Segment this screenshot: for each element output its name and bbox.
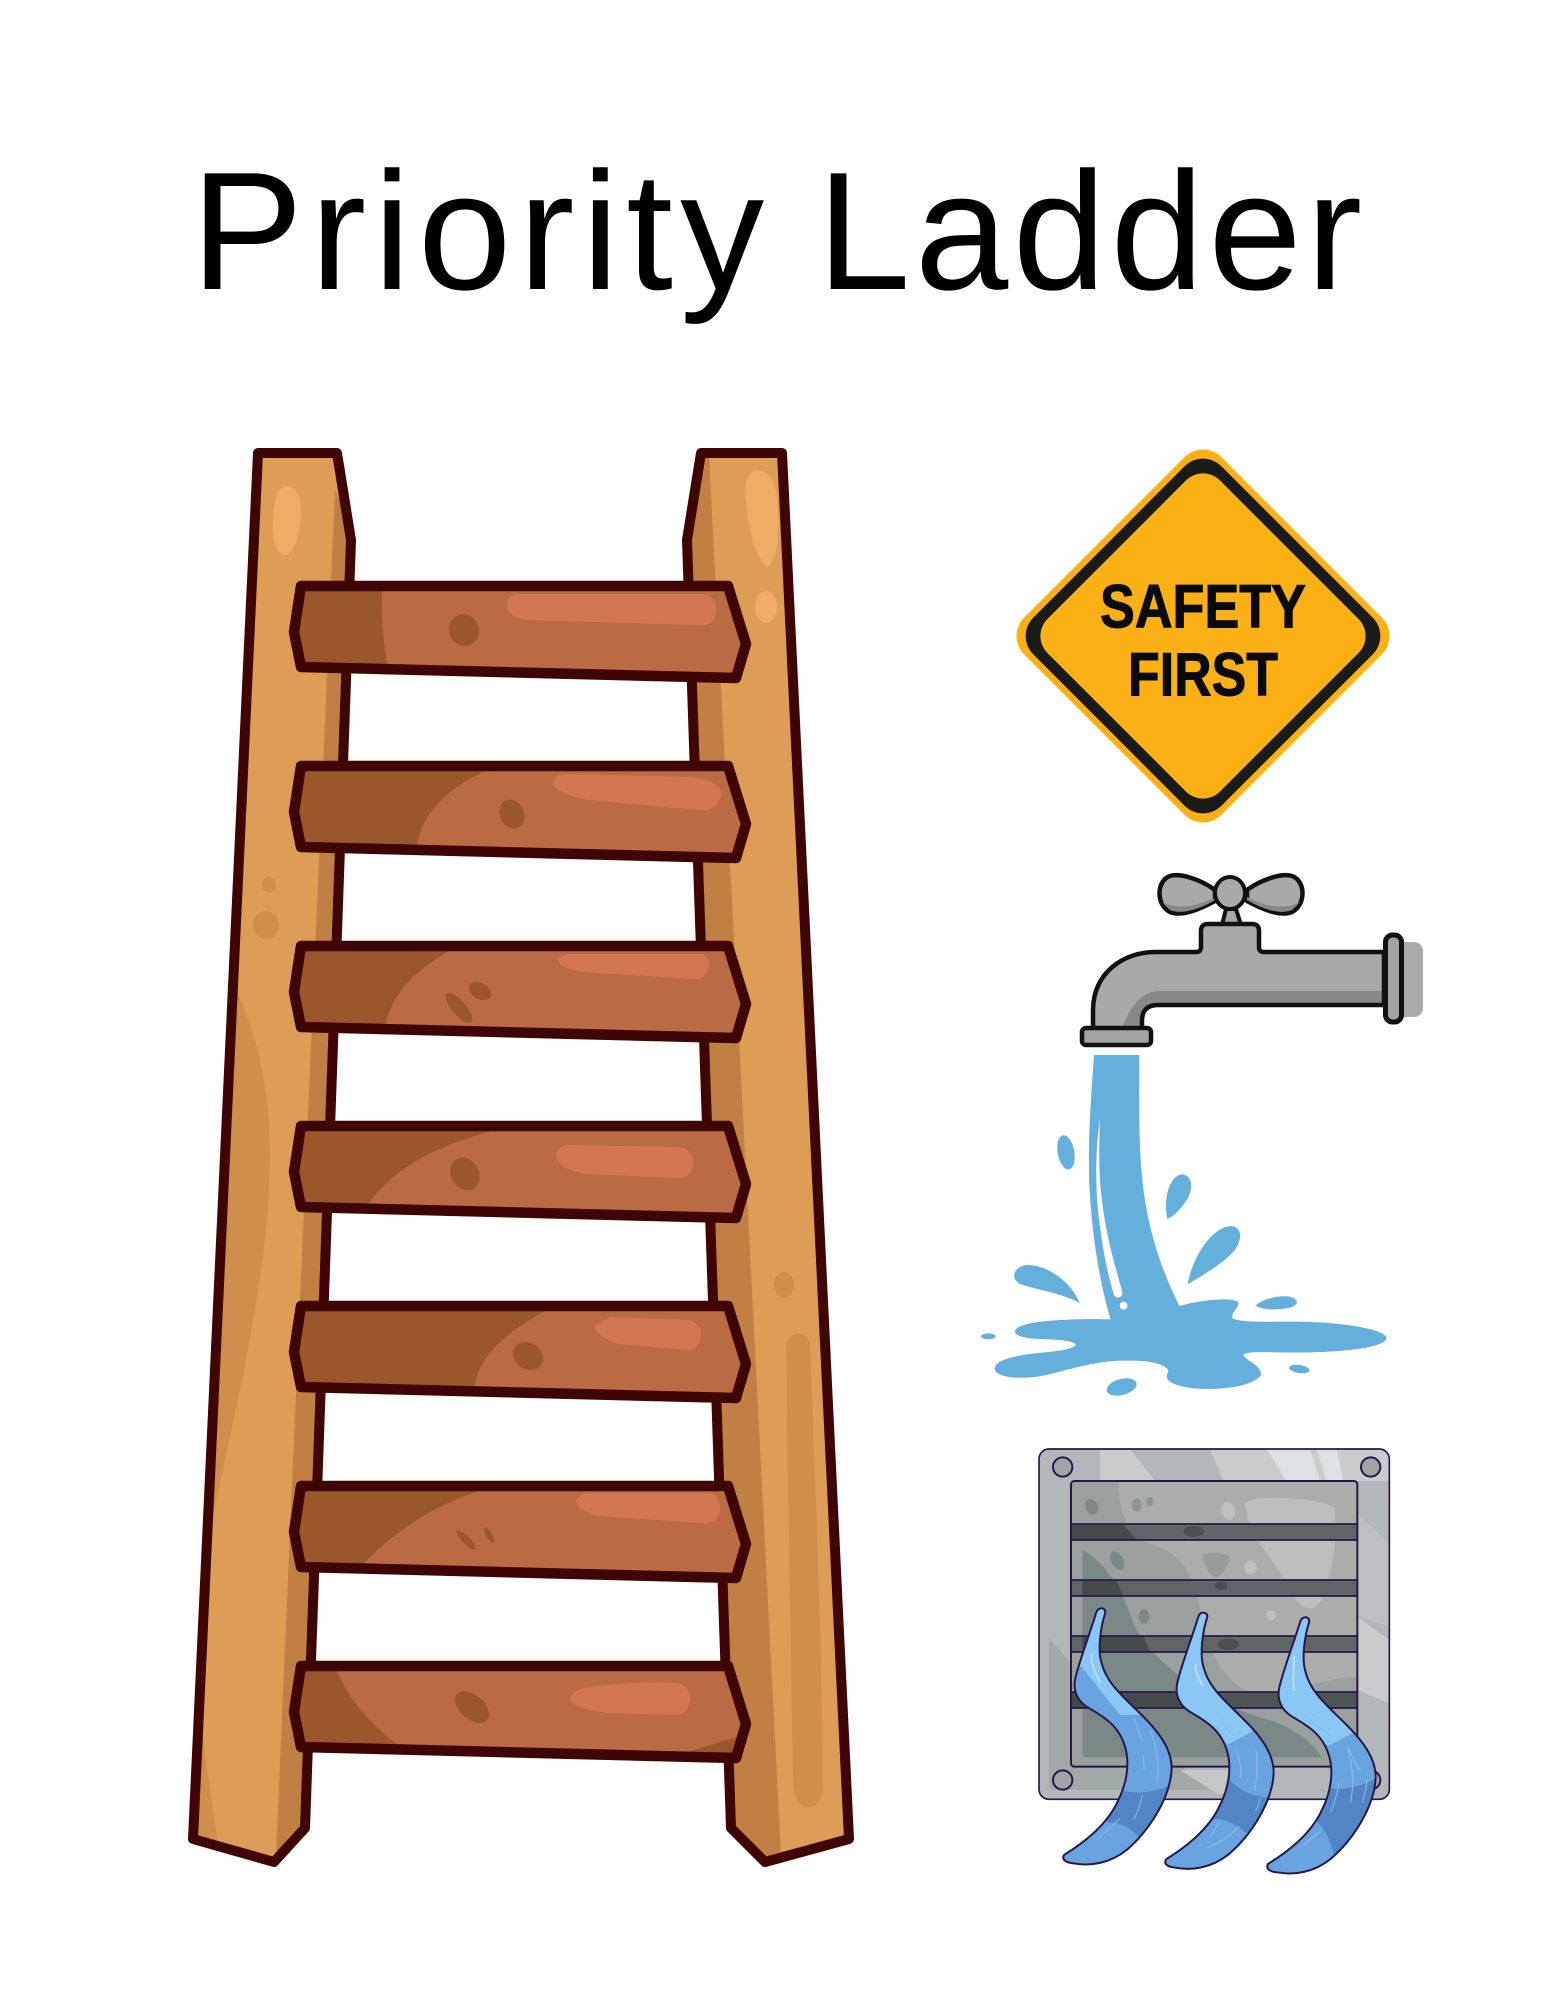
water tendril 2 [1162,1608,1279,1874]
right rail [678,450,849,1870]
rung 6 [288,1480,752,1584]
sign text: first: FIRST [1128,640,1278,708]
title: Priority [191,137,825,325]
rung 1 [288,580,752,684]
title: Ladder [817,137,1367,325]
icon: water stream and puddle [981,1055,1387,1399]
rung 5 [288,1300,752,1404]
water tendril 1 [1060,1603,1177,1870]
icon: faucet [1082,875,1423,1045]
rung 2 [288,760,752,864]
ladder [188,450,849,1870]
rung 3 [288,940,752,1044]
vent panel and slats [1071,1481,1357,1767]
vent plate [1039,1449,1389,1799]
rung 4 [288,1120,752,1224]
safety first sign [1006,439,1400,833]
water tendril 3 [1264,1612,1381,1879]
left rail [188,453,358,1870]
rung 7 [288,1660,752,1764]
icon: leaking vent [1039,1449,1389,1879]
sign text: safety: SAFETY [1100,572,1306,640]
